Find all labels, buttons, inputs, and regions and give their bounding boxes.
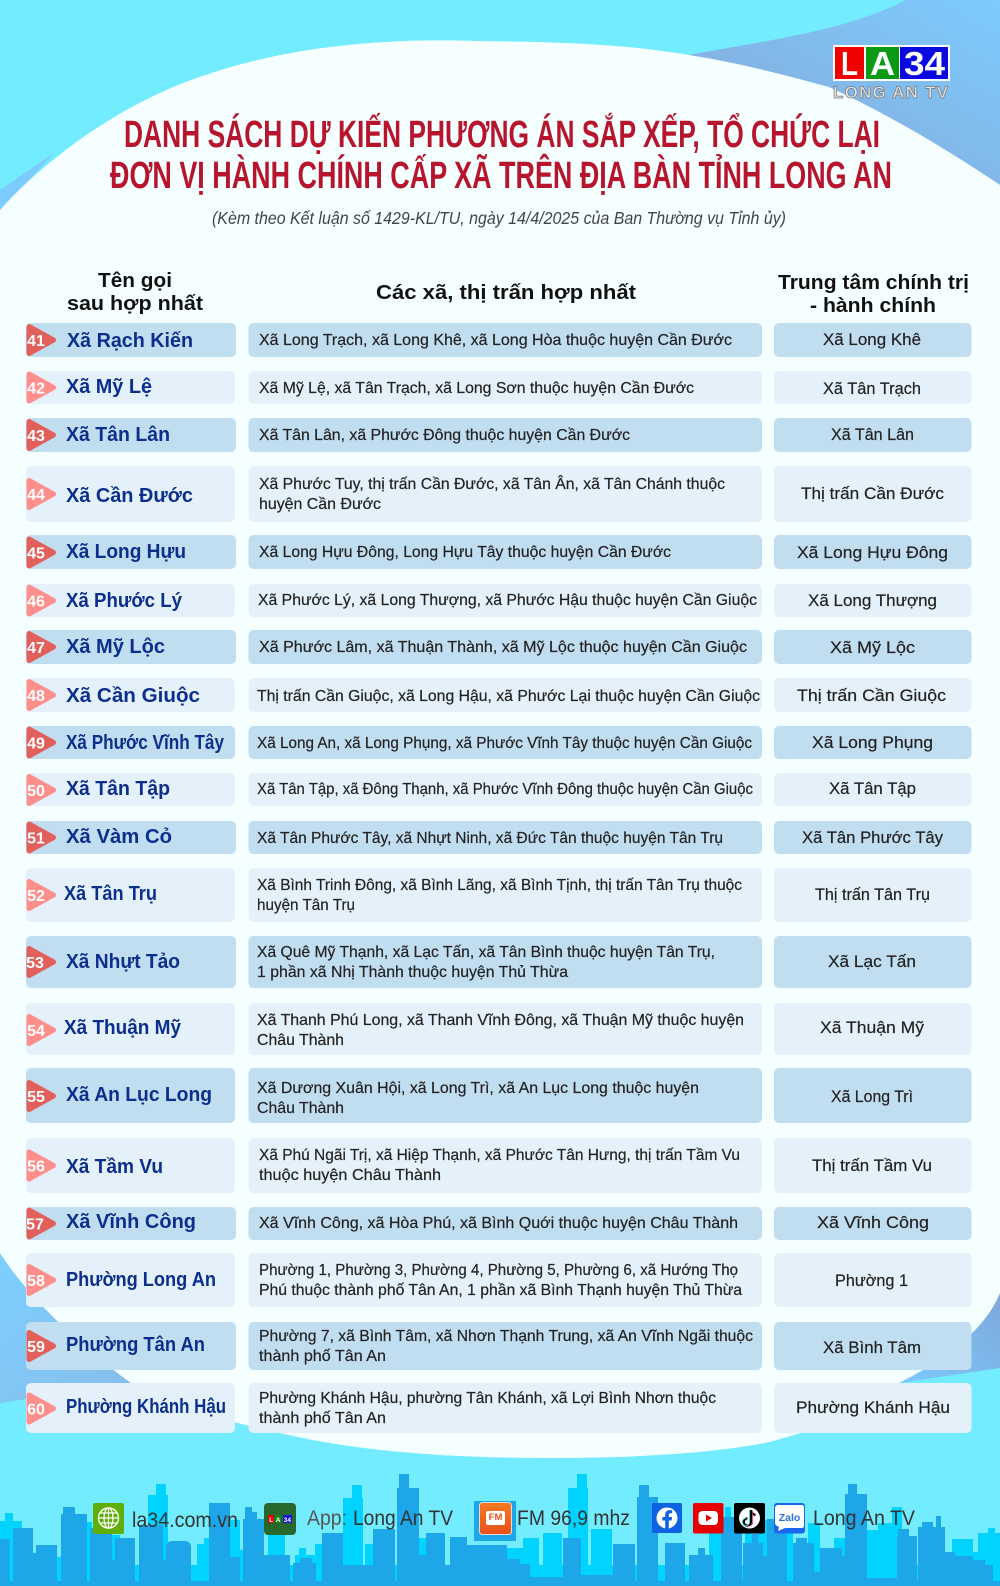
row 59: 59 bbox=[27, 1339, 45, 1356]
row 52: 52 bbox=[27, 888, 45, 905]
row 43: Xã Tân Lân bbox=[831, 425, 914, 444]
row 53: Xã Lạc Tấn bbox=[828, 952, 916, 971]
row 43: Xã Tân Lân, xã Phước Đông thuộc huyện Cần Đước bbox=[259, 427, 630, 444]
row 44: 44 bbox=[27, 487, 45, 504]
row 48: Thị trấn Cần Giuộc bbox=[797, 686, 947, 705]
row 48: Xã Cần Giuộc bbox=[66, 685, 200, 707]
row 46 bbox=[26, 584, 972, 617]
app label: App: bbox=[307, 1507, 347, 1530]
row 46: 46 bbox=[27, 594, 45, 610]
row 42: Xã Mỹ Lệ bbox=[66, 376, 152, 398]
row 42: Xã Tân Trạch bbox=[823, 379, 921, 398]
row 53: Xã Quê Mỹ Thạnh, xã Lạc Tấn, xã Tân Bình thuộc huyện Tân Trụ, bbox=[257, 944, 715, 961]
subtitle: (Kèm theo Kết luận số 1429-KL/TU, ngày 14/4/2025 của Ban Thường vụ Tỉnh ủy) bbox=[212, 208, 786, 228]
row 47: 47 bbox=[27, 640, 45, 657]
row 59: Phường 7, xã Bình Tâm, xã Nhơn Thạnh Trung, xã An Vĩnh Ngãi thuộc bbox=[259, 1328, 753, 1345]
icon: facebook bbox=[652, 1503, 682, 1533]
row 56: 56 bbox=[27, 1158, 45, 1176]
row 60: Phường Khánh Hậu bbox=[796, 1398, 950, 1417]
icon: tiktok bbox=[734, 1503, 765, 1534]
row 53: Xã Nhựt Tảo bbox=[66, 951, 180, 973]
column header: name: Tên gọi bbox=[98, 270, 172, 292]
row 43: 43 bbox=[27, 428, 45, 445]
row 50: Xã Tân Tập, xã Đông Thạnh, xã Phước Vĩnh Đông thuộc huyện Cần Giuộc bbox=[257, 781, 753, 798]
row 41: 41 bbox=[27, 333, 45, 350]
app label bbox=[307, 1507, 453, 1530]
row 59: Phường Tân An bbox=[66, 1334, 205, 1356]
row 44: Xã Phước Tuy, thị trấn Cần Đước, xã Tân Ân, xã Tân Chánh thuộc bbox=[259, 474, 725, 493]
row 55 bbox=[26, 1068, 972, 1123]
row 43: Xã Tân Lân bbox=[66, 424, 170, 446]
row 45: Xã Long Hựu Đông bbox=[797, 543, 948, 562]
icon: FM radio bbox=[480, 1502, 512, 1534]
row 49: Xã Long An, xã Long Phụng, xã Phước Vĩnh Tây thuộc huyện Cần Giuộc bbox=[257, 735, 752, 752]
column header: centre: Trung tâm chính trị bbox=[778, 272, 969, 294]
row 53: 1 phần xã Nhị Thành thuộc huyện Thủ Thừa bbox=[257, 964, 568, 981]
icon: FM radio: FM bbox=[489, 1512, 502, 1523]
row 41: Xã Long Khê bbox=[823, 330, 921, 349]
row 52: huyện Tân Trụ bbox=[257, 897, 355, 914]
row 59: thành phố Tân An bbox=[259, 1348, 386, 1365]
row 56: thuộc huyện Châu Thành bbox=[259, 1167, 441, 1184]
row 50 bbox=[26, 773, 972, 806]
column header: name: sau hợp nhất bbox=[67, 293, 203, 315]
row 50: 50 bbox=[27, 783, 45, 800]
row 44: Xã Cần Đước bbox=[66, 485, 193, 507]
row 58: Phường Long An bbox=[66, 1269, 216, 1291]
row 42 bbox=[26, 371, 972, 404]
row 41: Xã Rạch Kiến bbox=[67, 330, 193, 352]
row 48: 48 bbox=[27, 688, 45, 705]
row 46: Xã Phước Lý, xã Long Thượng, xã Phước Hậu thuộc huyện Cần Giuộc bbox=[258, 592, 757, 609]
row 57: Xã Vĩnh Công bbox=[66, 1211, 196, 1233]
row 58: Phường 1 bbox=[835, 1271, 908, 1290]
row 54: 54 bbox=[27, 1023, 45, 1040]
row 56: Xã Phú Ngãi Trị, xã Hiệp Thạnh, xã Phước Tân Hưng, thị trấn Tầm Vu bbox=[259, 1147, 740, 1164]
left blue sliver bbox=[0, 153, 54, 212]
row 52 bbox=[26, 868, 972, 922]
row 41 bbox=[26, 323, 972, 357]
row 42: 42 bbox=[27, 380, 45, 398]
row 59: Xã Bình Tâm bbox=[823, 1338, 921, 1357]
row 55: Xã Long Trì bbox=[831, 1087, 913, 1106]
row 56: Thị trấn Tầm Vu bbox=[812, 1156, 932, 1175]
column header: merged communes: Các xã, thị trấn hợp nhất bbox=[376, 282, 636, 304]
logo: LA34 Long An TV: A bbox=[870, 45, 895, 82]
logo: LA34 Long An TV: 34 bbox=[904, 45, 946, 82]
column header: centre: - hành chính bbox=[810, 295, 936, 317]
row 57: Xã Vĩnh Công bbox=[817, 1213, 929, 1232]
row 50: Xã Tân Tập bbox=[66, 778, 170, 800]
row 46: Xã Long Thượng bbox=[808, 591, 937, 610]
row 54: Châu Thành bbox=[257, 1032, 344, 1049]
top right blue shape bbox=[689, 0, 1000, 185]
row 54 bbox=[26, 1003, 972, 1055]
row 60: thành phố Tân An bbox=[259, 1410, 386, 1427]
website label: la34.com.vn bbox=[132, 1509, 238, 1532]
row 49: Xã Long Phụng bbox=[812, 733, 933, 752]
row 57: 57 bbox=[26, 1216, 44, 1234]
row 51: Xã Vàm Cỏ bbox=[66, 826, 172, 848]
row 60: 60 bbox=[27, 1402, 45, 1418]
row 43 bbox=[26, 418, 972, 452]
row 60: Phường Khánh Hậu bbox=[66, 1396, 226, 1418]
icon: website globe bbox=[93, 1503, 124, 1534]
row 54: Xã Thuận Mỹ bbox=[64, 1017, 182, 1039]
icon: app bbox=[264, 1503, 296, 1535]
icon: app: A bbox=[276, 1517, 281, 1524]
logo: LA34 Long An TV bbox=[833, 45, 950, 102]
row 44 bbox=[26, 466, 972, 522]
row 48 bbox=[26, 678, 972, 712]
row 53: 53 bbox=[26, 955, 44, 972]
row 58 bbox=[26, 1253, 972, 1307]
row 56: Xã Tầm Vu bbox=[66, 1156, 163, 1178]
bottom left blue shape bbox=[0, 1253, 131, 1403]
row 44: Thị trấn Cần Đước bbox=[801, 484, 944, 503]
row 54: Xã Thuận Mỹ bbox=[820, 1018, 925, 1037]
row 42: Xã Mỹ Lệ, xã Tân Trạch, xã Long Sơn thuộc huyện Cần Đước bbox=[259, 380, 694, 397]
icon: app: L bbox=[269, 1517, 273, 1524]
skyline bbox=[0, 1474, 1000, 1586]
icon: youtube bbox=[693, 1503, 724, 1534]
row 55: 55 bbox=[27, 1089, 45, 1106]
column header: centre bbox=[778, 272, 969, 317]
row 54: Xã Thanh Phú Long, xã Thanh Vĩnh Đông, xã Thuận Mỹ thuộc huyện bbox=[257, 1012, 744, 1029]
row 52: Xã Tân Trụ bbox=[64, 883, 157, 905]
icon: app: 34 bbox=[284, 1517, 291, 1524]
row 41: Xã Long Trạch, xã Long Khê, xã Long Hòa thuộc huyện Cần Đước bbox=[259, 332, 732, 349]
FM label: FM 96,9 mhz bbox=[517, 1507, 630, 1530]
row 45 bbox=[26, 535, 972, 569]
row 55: Xã An Lục Long bbox=[66, 1084, 212, 1106]
row 60 bbox=[26, 1383, 972, 1433]
icon: zalo bbox=[774, 1503, 805, 1534]
title bbox=[110, 111, 892, 197]
bottom right blue shape bbox=[899, 1293, 1000, 1383]
row 55: Châu Thành bbox=[257, 1100, 344, 1117]
row 51: Xã Tân Phước Tây, xã Nhựt Ninh, xã Đức Tân thuộc huyện Tân Trụ bbox=[257, 830, 723, 847]
logo: LA34 Long An TV: LONG AN TV bbox=[833, 83, 949, 102]
row 44: huyện Cần Đước bbox=[259, 496, 381, 513]
row 55: Xã Dương Xuân Hội, xã Long Trì, xã An Lục Long thuộc huyện bbox=[257, 1080, 699, 1097]
row 49 bbox=[26, 726, 972, 759]
app label: Long An TV bbox=[353, 1507, 453, 1530]
row 58: Phường 1, Phường 3, Phường 4, Phường 5, Phường 6, xã Hướng Thọ bbox=[259, 1262, 738, 1279]
row 58: Phú thuộc thành phố Tân An, 1 phần xã Bình Thạnh huyện Thủ Thừa bbox=[259, 1282, 742, 1299]
column header: name bbox=[67, 270, 203, 315]
row 57: Xã Vĩnh Công, xã Hòa Phú, xã Bình Quới thuộc huyện Châu Thành bbox=[259, 1215, 738, 1232]
row 51: 51 bbox=[27, 830, 45, 848]
icon: zalo: Zalo bbox=[779, 1512, 800, 1524]
row 60: Phường Khánh Hậu, phường Tân Khánh, xã Lợi Bình Nhơn thuộc bbox=[259, 1390, 716, 1407]
row 45: Xã Long Hựu Đông, Long Hựu Tây thuộc huyện Cần Đước bbox=[259, 544, 671, 561]
row 52: Xã Bình Trinh Đông, xã Bình Lãng, xã Bình Tịnh, thị trấn Tân Trụ thuộc bbox=[257, 877, 742, 894]
row 59 bbox=[26, 1322, 972, 1370]
logo: LA34 Long An TV: L bbox=[841, 45, 858, 82]
row 57 bbox=[26, 1207, 972, 1240]
row 46: Xã Phước Lý bbox=[66, 590, 183, 612]
row 52: Thị trấn Tân Trụ bbox=[815, 885, 930, 904]
row 49: 49 bbox=[27, 736, 45, 752]
row 45: 45 bbox=[27, 546, 45, 562]
row 51: Xã Tân Phước Tây bbox=[802, 828, 943, 847]
row 53 bbox=[26, 936, 972, 988]
row 47: Xã Phước Lâm, xã Thuận Thành, xã Mỹ Lộc thuộc huyện Cần Giuộc bbox=[259, 639, 747, 656]
row 48: Thị trấn Cần Giuộc, xã Long Hậu, xã Phước Lại thuộc huyện Cần Giuộc bbox=[257, 688, 760, 705]
row 47: Xã Mỹ Lộc bbox=[66, 636, 165, 658]
row 50: Xã Tân Tập bbox=[829, 779, 916, 798]
social label: Long An TV bbox=[813, 1507, 915, 1530]
row 45: Xã Long Hựu bbox=[66, 541, 186, 563]
row 56 bbox=[26, 1138, 972, 1193]
row 49: Xã Phước Vĩnh Tây bbox=[66, 732, 225, 754]
row 51 bbox=[26, 821, 972, 854]
row 47 bbox=[26, 630, 972, 664]
row 47: Xã Mỹ Lộc bbox=[830, 638, 916, 657]
row 58: 58 bbox=[27, 1273, 45, 1290]
